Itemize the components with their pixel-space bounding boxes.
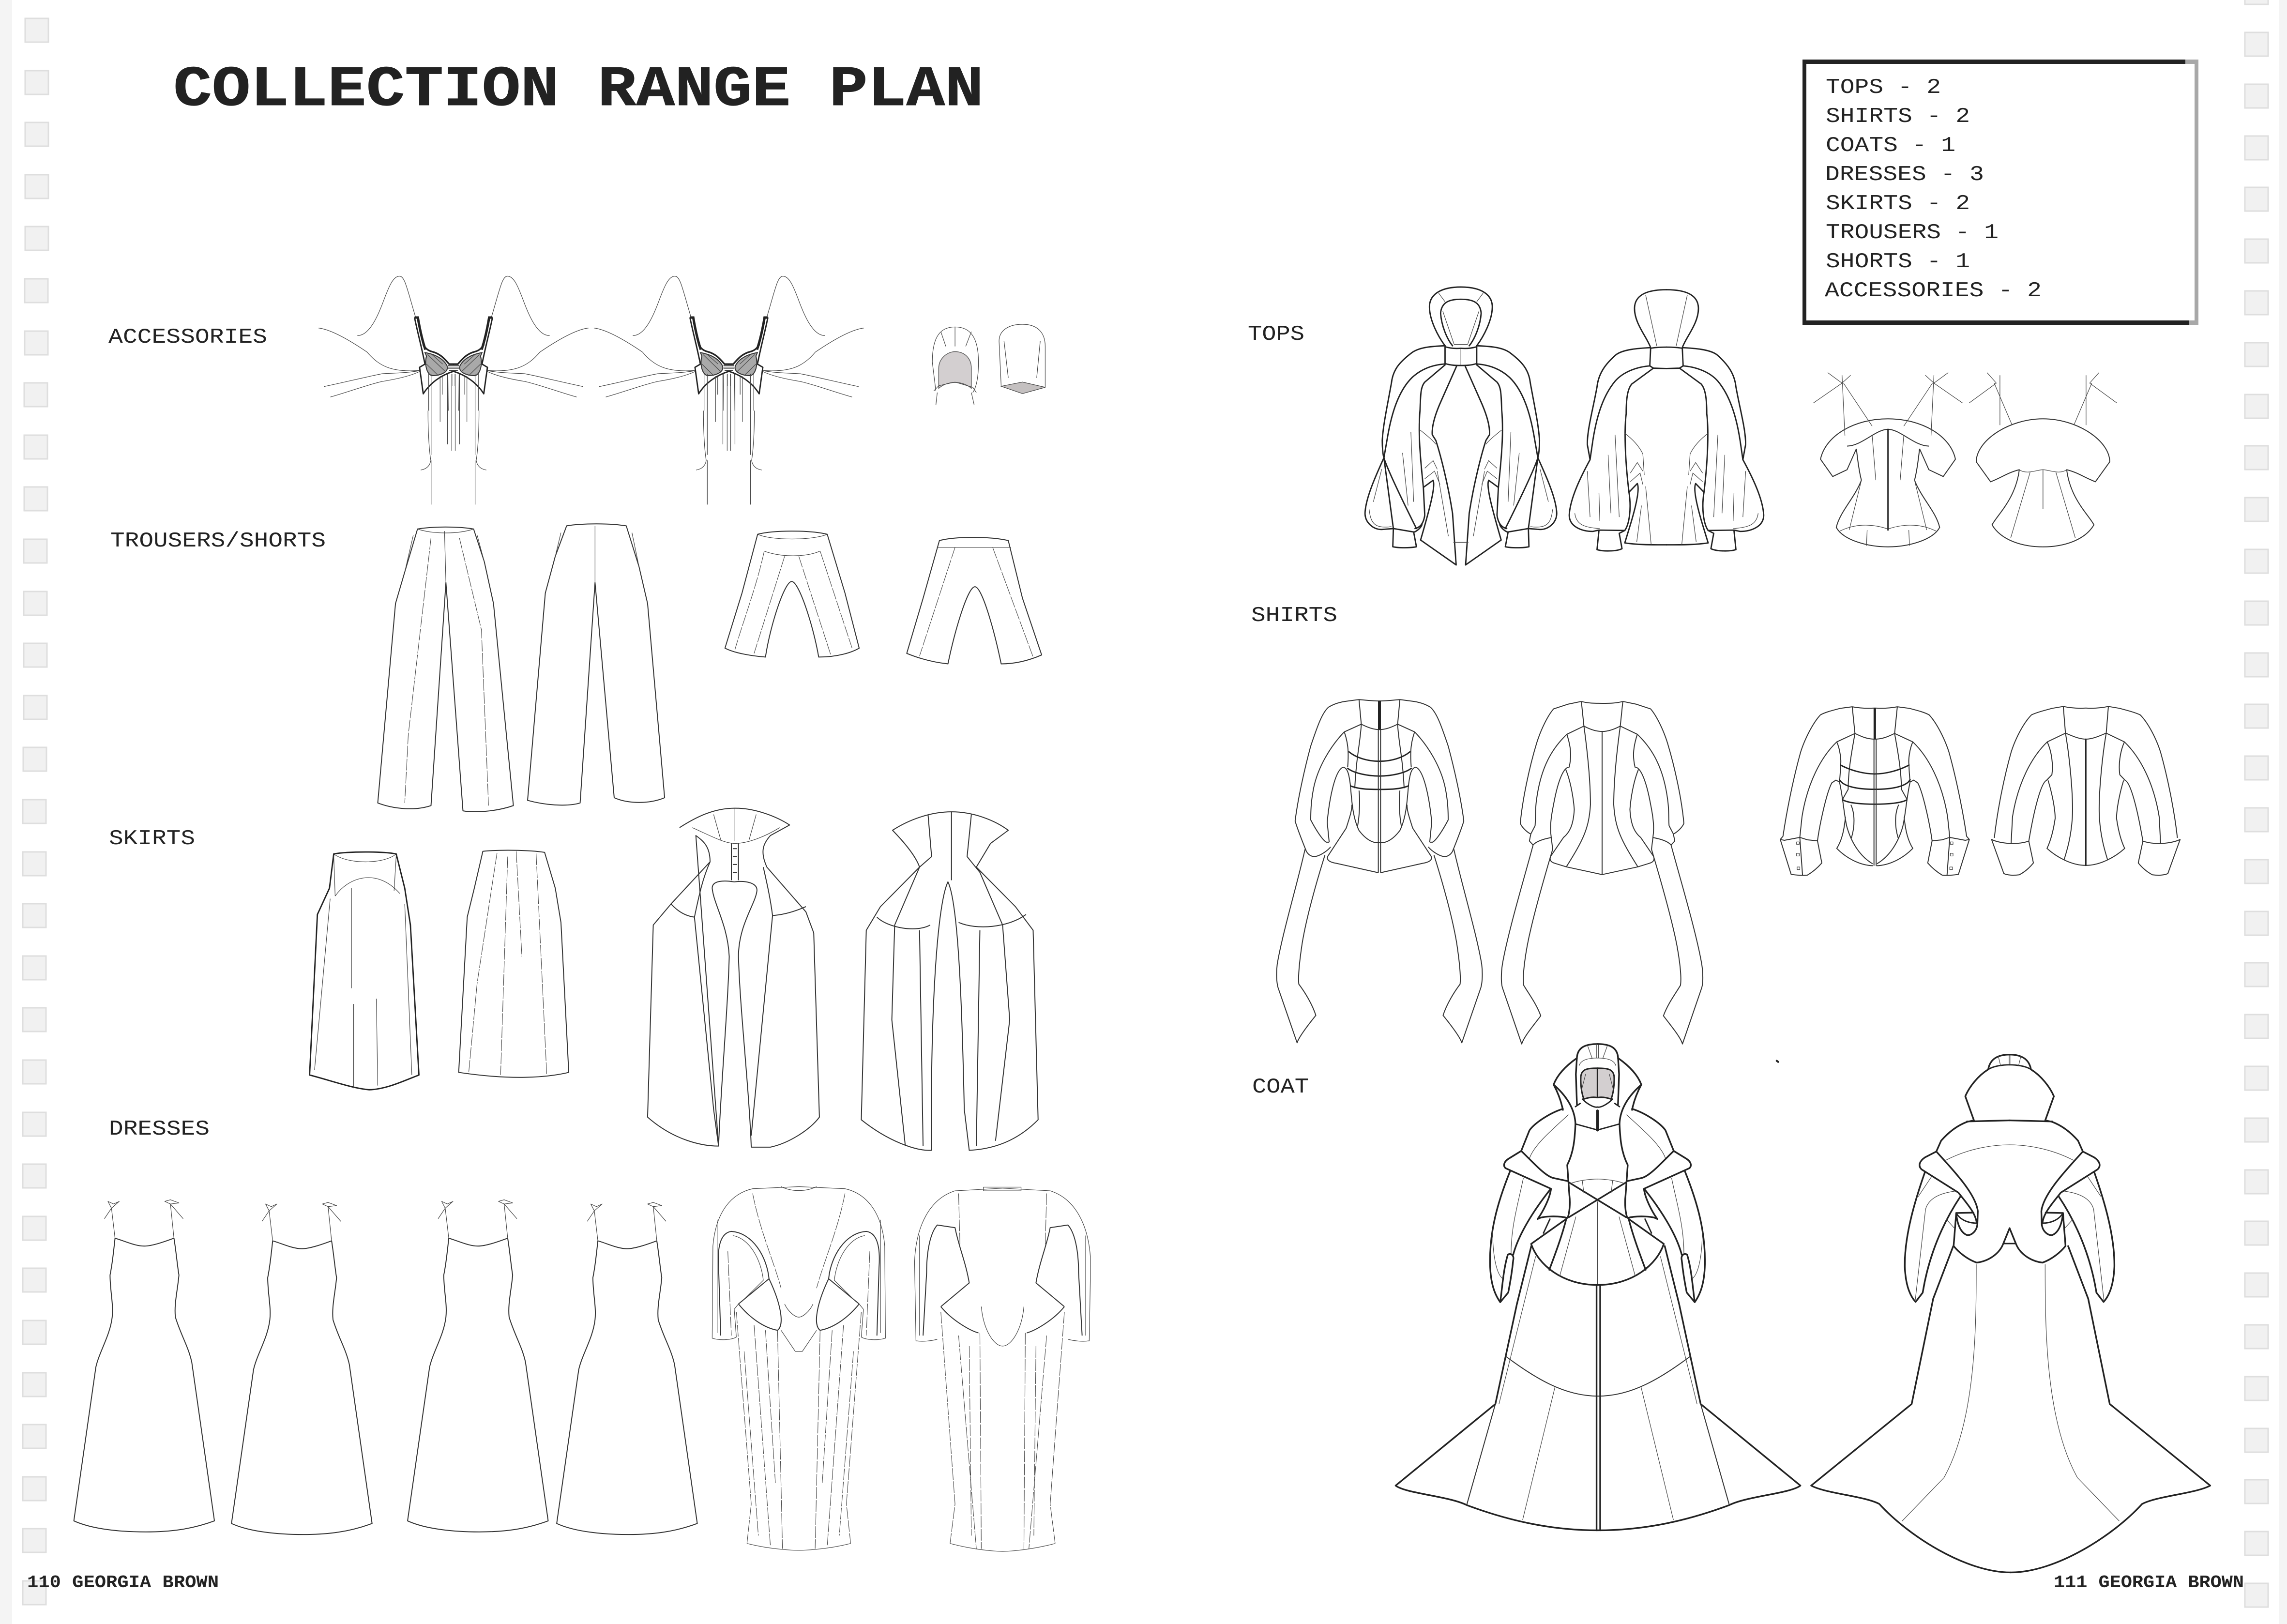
section label: tops: TOPS [1248,322,1304,347]
coat: back upper [1905,1055,2114,1302]
accessories: harness front [318,276,589,504]
legend box: range counts: TOPS - 2 [1826,76,1941,100]
skirt: long front with collar [648,808,819,1147]
binding holes: left page [23,18,48,1605]
page footer left: 110 GEORGIA BROWN [27,1573,219,1593]
coat: front upper [1490,1044,1705,1302]
coat: back train [1777,1061,2210,1572]
section label: shirts: SHIRTS [1251,604,1337,628]
trousers back [528,524,665,805]
legend box: range counts [1802,60,2198,325]
skirt: front [310,852,419,1090]
legend box: range counts: COATS - 1 [1826,134,1955,158]
legend box: range counts: SKIRTS - 2 [1826,192,1970,216]
skirt: back [459,850,569,1078]
accessories: mask front and back [932,324,1045,405]
shirt: cuffed front [1780,707,1969,875]
section label: trousers/shorts: TROUSERS/SHORTS [110,529,326,553]
skirt: long back with collar [861,812,1038,1151]
top: hooded cape back [1569,289,1764,551]
top: corset with shell collar, back [1969,373,2117,547]
dress: long sleeved front [712,1186,885,1550]
shorts back [907,537,1042,664]
binding holes: right page [2245,0,2268,1607]
trousers front [378,527,514,812]
section label: dresses: DRESSES [109,1117,210,1141]
dress: strappy back [231,1202,372,1534]
coat: front skirt [1395,1246,1801,1530]
top: corset with shell collar, front [1813,373,1963,547]
dress: second strappy front [408,1200,548,1532]
section label: accessories: ACCESSORIES [108,325,267,349]
legend box: range counts: SHIRTS - 2 [1826,105,1970,129]
dress: strappy front [74,1200,214,1532]
dress: long sleeved back [914,1187,1090,1551]
shorts front [725,531,859,657]
section label: skirts: SKIRTS [109,827,195,851]
section label: coat: COAT [1252,1075,1309,1099]
legend box: range counts: TROUSERS - 1 [1826,221,1999,245]
shirt: long tail sleeve front [1277,699,1482,1043]
page footer right: 111 GEORGIA BROWN [2054,1573,2244,1593]
title: COLLECTION RANGE PLAN [173,58,984,122]
legend box: range counts: DRESSES - 3 [1825,163,1984,187]
shirt: cuffed back [1992,706,2180,875]
accessories: harness back [594,276,864,504]
legend box: range counts: SHORTS - 1 [1826,250,1970,274]
legend box: range counts: ACCESSORIES - 2 [1825,279,2042,303]
dress: second strappy back [557,1202,697,1534]
top: hooded cape front [1365,287,1557,565]
shirt: long tail sleeve back [1501,701,1703,1044]
